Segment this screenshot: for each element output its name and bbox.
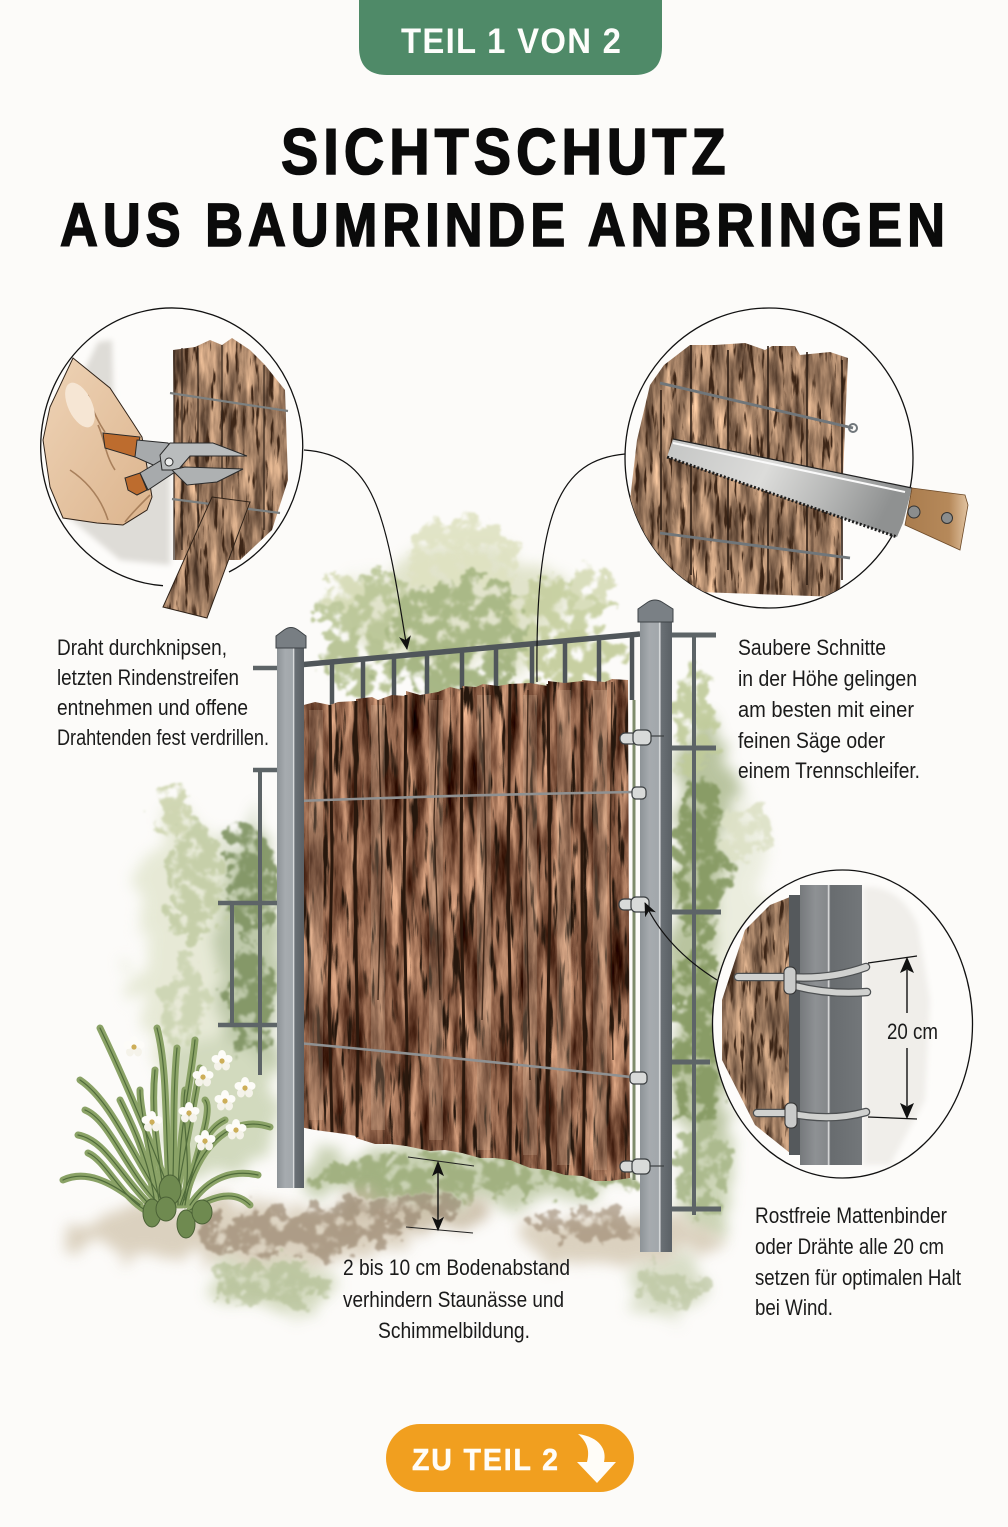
hand <box>43 358 152 525</box>
button: zu Teil 2 <box>386 1424 634 1492</box>
flowers <box>124 1036 256 1150</box>
icon: curved arrow <box>577 1434 616 1483</box>
circle outline <box>41 308 303 586</box>
title <box>60 115 945 260</box>
ground <box>65 1196 720 1309</box>
text: clean cuts: einem Trennschleifer. <box>738 758 920 783</box>
text: cutting wire: Drahtenden fest verdrillen. <box>57 725 269 750</box>
text: ground clearance: Schimmelbildung. <box>378 1318 530 1343</box>
detail circle: saw <box>625 308 968 608</box>
text: cutting wire: entnehmen und offene <box>57 695 248 720</box>
bark strip <box>163 497 250 618</box>
left post <box>276 628 306 1188</box>
leader line: binder <box>645 903 717 980</box>
foliage behind fence <box>135 515 767 1235</box>
text: binders: setzen für optimalen Halt <box>755 1265 961 1290</box>
binders <box>738 967 867 1117</box>
text: cutting wire: Draht durchknipsen, <box>57 635 227 660</box>
bark sample <box>722 897 790 1153</box>
header tab <box>359 0 662 75</box>
ground clearance arrow <box>406 1157 474 1233</box>
text: binders: bei Wind. <box>755 1295 833 1320</box>
detail circle: post with binders <box>712 870 972 1178</box>
text: ground clearance: verhindern Staunässe und <box>343 1287 564 1312</box>
text: clean cuts: am besten mit einer <box>738 697 914 722</box>
bark sample <box>630 343 848 597</box>
text: ground clearance <box>343 1255 570 1343</box>
plank seams <box>329 682 613 1176</box>
20 cm dimension <box>868 956 938 1119</box>
wire mesh fence behind <box>218 634 721 1215</box>
plank highlights <box>316 690 600 1170</box>
title: SICHTSCHUTZ <box>281 115 726 188</box>
bark sample <box>173 338 288 560</box>
text: cutting wire <box>57 635 269 750</box>
text: clean cuts: in der Höhe gelingen <box>738 666 917 691</box>
button: zu Teil 2: ZU TEIL 2 <box>412 1443 558 1477</box>
text: binders <box>755 1203 961 1320</box>
leader line: wire cutting <box>304 450 407 649</box>
top rail and pickets <box>298 634 640 1180</box>
text: clean cuts <box>738 635 920 783</box>
20 cm dimension: 20 cm <box>887 1019 938 1044</box>
header tab label: TEIL 1 VON 2 <box>401 22 621 61</box>
panel wires <box>298 792 640 1078</box>
title: AUS BAUMRINDE ANBRINGEN <box>60 191 945 260</box>
saw <box>667 439 968 550</box>
text: ground clearance: 2 bis 10 cm Bodenabstand <box>343 1255 570 1280</box>
leader line: saw <box>537 454 625 682</box>
wire clips <box>619 730 664 1174</box>
plant with flowers <box>63 1028 270 1238</box>
right post <box>638 600 673 1252</box>
text: clean cuts: Saubere Schnitte <box>738 635 886 660</box>
bark panel <box>298 679 640 1181</box>
text: cutting wire: letzten Rindenstreifen <box>57 665 239 690</box>
pliers <box>103 433 247 495</box>
text: binders: oder Drähte alle 20 cm <box>755 1234 944 1259</box>
post <box>800 885 862 1165</box>
detail circle: cutting wire <box>41 308 304 618</box>
text: clean cuts: feinen Säge oder <box>738 728 885 753</box>
text: binders: Rostfreie Mattenbinder <box>755 1203 947 1228</box>
